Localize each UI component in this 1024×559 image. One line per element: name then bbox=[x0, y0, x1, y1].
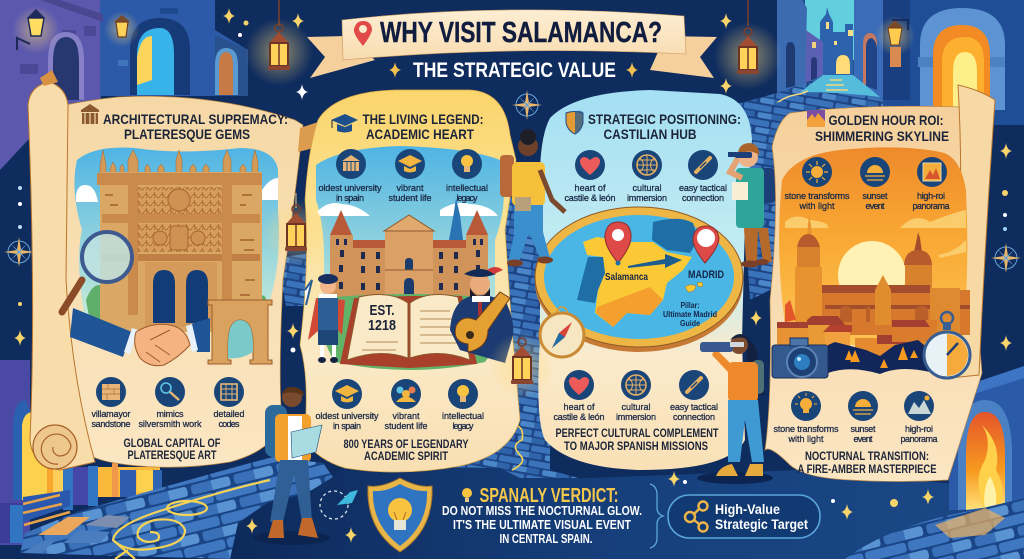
sky behind campus bbox=[316, 146, 504, 330]
benefit labels lower row: castile & león bbox=[554, 412, 604, 422]
callout pill bbox=[668, 495, 820, 538]
panel takeaway: PLATERESQUE ART bbox=[128, 448, 217, 462]
benefit icons lower row bbox=[791, 391, 934, 421]
benefit labels top row: immersion bbox=[627, 193, 667, 203]
figure: traveler woman with backpack bbox=[500, 129, 565, 266]
benefit icons lower row bbox=[564, 370, 709, 400]
benefit labels top row: castile & león bbox=[564, 193, 616, 203]
heading: PLATERESQUE GEMS bbox=[124, 126, 250, 142]
pin: salamanca bbox=[605, 222, 631, 266]
benefit labels: silversmith work bbox=[138, 419, 202, 429]
camera bbox=[772, 338, 828, 378]
benefit labels lower row bbox=[774, 424, 938, 444]
panel: golden hour roi bbox=[765, 85, 995, 482]
decor: comet swirl bbox=[320, 490, 358, 519]
benefit labels lower row: cultural bbox=[622, 402, 650, 412]
background: right side cobbles behind panel bbox=[738, 100, 790, 300]
sky behind facade bbox=[74, 148, 279, 320]
callout pill: Strategic Target bbox=[715, 516, 808, 532]
benefit labels lower row: with light bbox=[788, 434, 824, 444]
benefit labels top row: legacy bbox=[456, 193, 478, 203]
benefit labels top row: intellectual bbox=[446, 183, 488, 193]
plateresque facade bbox=[97, 150, 262, 332]
benefit icons top row bbox=[336, 149, 482, 179]
benefit labels top row: with light bbox=[798, 201, 835, 211]
benefit labels lower row: stone transforms bbox=[774, 424, 839, 434]
heading: GOLDEN HOUR ROI: bbox=[828, 112, 944, 128]
benefit labels lower row: heart of bbox=[564, 402, 595, 412]
panel takeaway bbox=[344, 437, 468, 463]
benefit labels top row: sunset bbox=[862, 191, 888, 201]
benefit labels lower row: sunset bbox=[850, 424, 876, 434]
benefit labels lower row bbox=[316, 411, 484, 431]
panel takeaway bbox=[556, 426, 719, 453]
callout pill: High-Value bbox=[715, 501, 780, 517]
panel takeaway: TO MAJOR SPANISH MISSIONS bbox=[564, 439, 708, 453]
benefit icons top row bbox=[802, 157, 947, 187]
hanging lantern: between panels two and three bbox=[488, 332, 556, 400]
benefit labels top row: cultural bbox=[632, 183, 662, 193]
background: gap cobbles between first panels bbox=[277, 252, 318, 306]
lit cobbles near furnace bbox=[935, 508, 1005, 538]
benefit labels lower row: immersion bbox=[616, 412, 656, 422]
benefit labels: mimics bbox=[156, 409, 184, 419]
benefit labels top row: student life bbox=[388, 193, 432, 203]
figure: man with binoculars bbox=[728, 143, 777, 268]
benefit labels top row: event bbox=[866, 201, 885, 211]
heading: SHIMMERING SKYLINE bbox=[815, 128, 949, 144]
benefit labels lower row: panorama bbox=[900, 434, 938, 444]
lamp: blue wall lantern bbox=[104, 11, 140, 47]
benefit labels top row bbox=[564, 183, 727, 203]
open book with founding date bbox=[340, 295, 477, 368]
benefit icons row bbox=[96, 377, 244, 407]
benefit labels top row: vibrant bbox=[396, 183, 424, 193]
figure: musician with lute bbox=[450, 267, 513, 363]
grass ground bbox=[320, 294, 500, 370]
benefit labels top row: high-roi bbox=[917, 191, 945, 201]
icon: verdict bulb bbox=[462, 488, 472, 502]
scroll roll right bbox=[950, 85, 995, 378]
magnifying glass bbox=[62, 232, 132, 312]
benefit icons lower row bbox=[332, 379, 478, 409]
benefit labels: codes bbox=[218, 419, 240, 429]
heading: STRATEGIC POSITIONING: bbox=[588, 111, 741, 127]
figure: traveler with map bbox=[254, 387, 330, 545]
background: lower right dark sky patch bbox=[985, 125, 1024, 375]
heading: ACADEMIC HEART bbox=[366, 126, 474, 142]
pin: madrid bbox=[693, 226, 719, 263]
background: glowing archway upper right bbox=[918, 8, 1005, 112]
benefit labels lower row: student life bbox=[384, 421, 428, 431]
verdict text: IT'S THE ULTIMATE VISUAL EVENT bbox=[453, 517, 631, 532]
open book with founding date: 1218 bbox=[368, 317, 396, 334]
title ribbon bbox=[307, 10, 717, 78]
benefit labels top row bbox=[318, 183, 488, 203]
open book with founding date: EST. bbox=[370, 302, 394, 319]
panel takeaway: PERFECT CULTURAL COMPLEMENT bbox=[556, 426, 719, 440]
background: right street buildings bbox=[777, 0, 1024, 128]
lower right arch furnace bbox=[947, 366, 1024, 510]
panel takeaway: A FIRE-AMBER MASTERPIECE bbox=[798, 462, 936, 476]
parchment sheet bbox=[765, 106, 982, 482]
hanging lantern: between panels one and two bbox=[262, 193, 330, 267]
panel: living legend bbox=[300, 90, 520, 472]
benefit labels top row: heart of bbox=[574, 183, 606, 193]
panel takeaway: 800 YEARS OF LEGENDARY bbox=[344, 437, 468, 451]
background: upper right cobbled road bbox=[700, 75, 883, 250]
verdict text bbox=[442, 485, 642, 546]
panel: strategic positioning bbox=[535, 90, 752, 470]
panel takeaway: GLOBAL CAPITAL OF bbox=[124, 436, 220, 450]
map labels: Salamanca bbox=[605, 272, 648, 283]
scroll roll left bbox=[28, 70, 95, 470]
heading: THE LIVING LEGEND: bbox=[362, 111, 484, 127]
background: left street buildings bbox=[0, 0, 248, 170]
ribbon band bbox=[342, 10, 686, 60]
hanging lantern: top left bbox=[245, 0, 313, 86]
stopwatch bbox=[924, 312, 970, 378]
verdict: shield icon bbox=[368, 478, 432, 552]
heading: CASTILIAN HUB bbox=[604, 126, 696, 142]
background: lower left buildings bbox=[0, 360, 162, 545]
background: lower left cobblestones bbox=[20, 457, 333, 559]
panel takeaway: NOCTURNAL TRANSITION: bbox=[805, 449, 929, 463]
benefit labels lower row: event bbox=[854, 434, 873, 444]
sunset sky bbox=[779, 147, 967, 345]
heading: ARCHITECTURAL SUPREMACY: bbox=[103, 111, 288, 127]
icon: map pin bbox=[354, 21, 372, 46]
ribbon tails bbox=[307, 36, 375, 78]
heading bbox=[807, 110, 949, 144]
handshake bbox=[70, 308, 210, 366]
benefit icons top row bbox=[575, 150, 718, 180]
panel takeaway bbox=[798, 449, 936, 476]
parchment sheet bbox=[60, 96, 303, 467]
background: lit road highlight bbox=[800, 75, 880, 97]
lamp: left wall lantern bbox=[12, 6, 60, 54]
background: center cobbled road bbox=[360, 160, 578, 480]
map labels bbox=[605, 269, 724, 328]
benefit labels top row: easy tactical bbox=[679, 183, 727, 193]
benefit labels lower row: connection bbox=[673, 412, 715, 422]
benefit labels lower row: in spain bbox=[333, 421, 361, 431]
panel takeaway bbox=[124, 436, 220, 462]
compass bbox=[540, 307, 584, 357]
verdict text: SPANALY VERDICT: bbox=[480, 485, 618, 507]
path: glowing yellow swirl bbox=[113, 425, 523, 559]
benefit labels lower row: oldest university bbox=[316, 411, 379, 421]
heading bbox=[566, 111, 741, 142]
benefit labels top row: connection bbox=[682, 193, 724, 203]
map of spain bbox=[535, 207, 743, 352]
background: lamp right wall bbox=[875, 16, 915, 67]
benefit labels lower row: legacy bbox=[452, 421, 474, 431]
tan and grey stones bbox=[22, 515, 130, 553]
panel: architectural supremacy bbox=[28, 70, 318, 470]
icon: share nodes bbox=[685, 502, 708, 532]
university building bbox=[330, 198, 488, 298]
benefit labels lower row bbox=[554, 402, 718, 422]
benefit labels bbox=[92, 409, 244, 429]
figure: student with cape bbox=[305, 274, 345, 363]
brace bbox=[650, 484, 663, 548]
map labels: MADRID bbox=[688, 269, 724, 281]
benefit labels lower row: easy tactical bbox=[670, 402, 718, 412]
benefit labels lower row: intellectual bbox=[442, 411, 484, 421]
small stone arch bbox=[208, 300, 272, 364]
benefit labels top row: stone transforms bbox=[784, 191, 850, 201]
benefit labels top row: oldest university bbox=[318, 183, 382, 193]
map labels: Guide bbox=[680, 319, 700, 328]
hanging lantern: top right bbox=[714, 0, 782, 90]
heading bbox=[331, 111, 484, 142]
panel takeaway: ACADEMIC SPIRIT bbox=[364, 449, 449, 463]
verdict text: DO NOT MISS THE NOCTURNAL GLOW. bbox=[442, 503, 642, 518]
benefit labels: detailed bbox=[214, 409, 244, 419]
benefit labels top row bbox=[784, 191, 950, 211]
heading bbox=[81, 104, 288, 142]
sheet bbox=[538, 90, 752, 470]
benefit labels lower row: vibrant bbox=[392, 411, 420, 421]
verdict text: IN CENTRAL SPAIN. bbox=[500, 531, 592, 546]
map labels: Ultimate Madrid bbox=[663, 310, 717, 319]
background: bottom navy ground bbox=[230, 466, 1024, 559]
benefit labels: sandstone bbox=[92, 419, 130, 429]
dark foreground with flames bbox=[828, 340, 930, 374]
scroll tab right bbox=[298, 122, 318, 152]
title text: WHY VISIT SALAMANCA? bbox=[380, 17, 662, 49]
benefit labels: villamayor bbox=[92, 409, 130, 419]
benefit labels top row: in spain bbox=[336, 193, 364, 203]
figure: photographer bbox=[697, 334, 773, 484]
parchment sheet bbox=[300, 90, 520, 472]
lower right cobbles bbox=[845, 498, 1024, 559]
benefit labels top row: panorama bbox=[912, 201, 950, 211]
skyline bbox=[777, 215, 970, 358]
benefit labels lower row: high-roi bbox=[905, 424, 933, 434]
subtitle: THE STRATEGIC VALUE bbox=[413, 59, 616, 82]
map labels: Pillar: bbox=[680, 301, 700, 310]
